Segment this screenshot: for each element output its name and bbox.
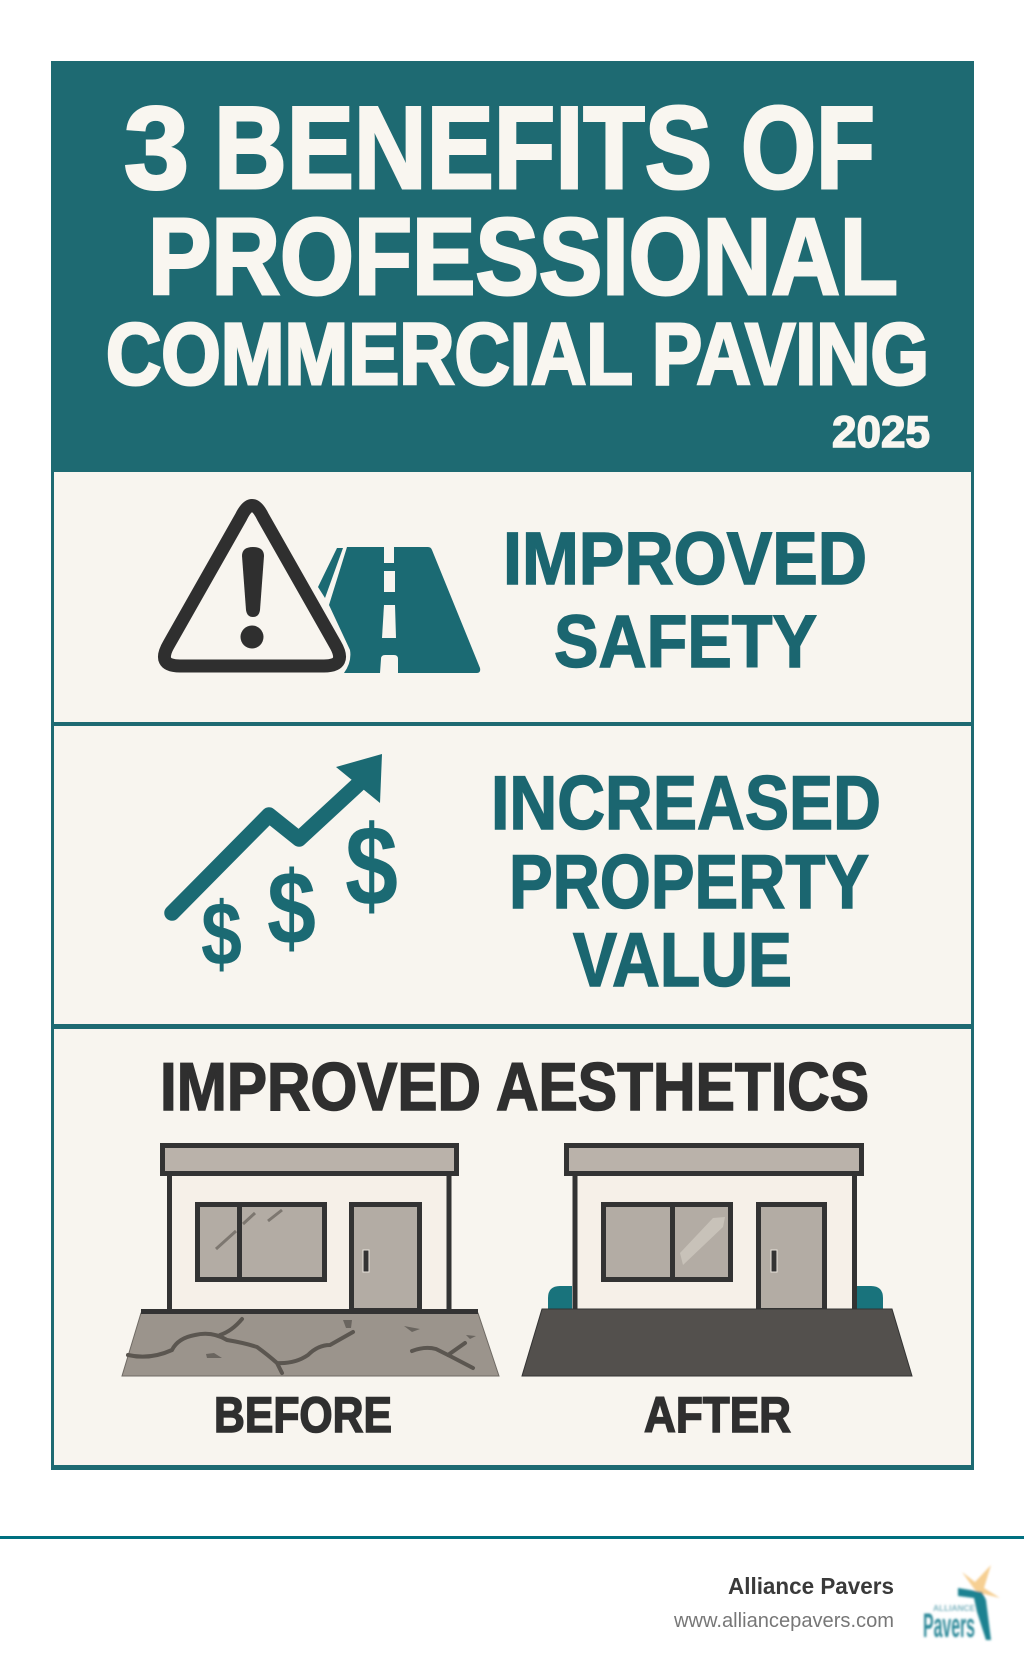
heading: improved safety bbox=[503, 517, 867, 683]
heading: improved safety: SAFETY bbox=[554, 600, 817, 683]
title block: OF bbox=[741, 82, 875, 213]
icon: dollar signs: $ bbox=[267, 851, 316, 967]
footer website: www.alliancepavers.com bbox=[673, 1610, 894, 1632]
heading: increased property value bbox=[491, 761, 881, 1003]
label: after: AFTER bbox=[644, 1387, 791, 1443]
infographic frame bbox=[51, 61, 974, 1470]
icon: dollar signs bbox=[201, 803, 398, 985]
title block: 2025 bbox=[832, 408, 930, 457]
footer company name: Alliance Pavers bbox=[728, 1573, 894, 1599]
icon: rising arrow bbox=[172, 754, 382, 913]
footer rule bbox=[0, 1536, 1024, 1539]
heading: improved safety: IMPROVED bbox=[503, 517, 867, 600]
label: before: BEFORE bbox=[214, 1387, 392, 1443]
title block: 3 bbox=[124, 82, 189, 213]
icon: dollar signs: $ bbox=[201, 885, 242, 985]
illustration: after building bbox=[522, 1146, 912, 1376]
title block: BENEFITS bbox=[214, 82, 712, 213]
footer logo: ALLIANCE bbox=[933, 1604, 976, 1613]
illustration: before building bbox=[122, 1146, 499, 1376]
heading: improved aesthetics: IMPROVED bbox=[160, 1049, 481, 1125]
icon: road bbox=[318, 547, 480, 673]
panel: improved aesthetics bbox=[54, 1029, 971, 1465]
footer logo bbox=[923, 1565, 1000, 1645]
icon: dollar signs: $ bbox=[345, 803, 398, 930]
heading: improved aesthetics: AESTHETICS bbox=[496, 1049, 869, 1125]
heading: increased property value: INCREASED bbox=[491, 761, 881, 846]
title block: PROFESSIONAL bbox=[148, 196, 898, 318]
title block bbox=[106, 82, 930, 457]
heading: improved aesthetics bbox=[160, 1049, 869, 1125]
title block: COMMERCIAL bbox=[106, 306, 633, 403]
panel: increased property value bbox=[54, 726, 971, 1024]
title block: PAVING bbox=[652, 306, 929, 403]
panel: improved safety bbox=[54, 472, 971, 722]
heading: increased property value: PROPERTY bbox=[509, 840, 869, 925]
icon: warning triangle bbox=[164, 506, 340, 666]
heading: increased property value: VALUE bbox=[573, 918, 792, 1003]
